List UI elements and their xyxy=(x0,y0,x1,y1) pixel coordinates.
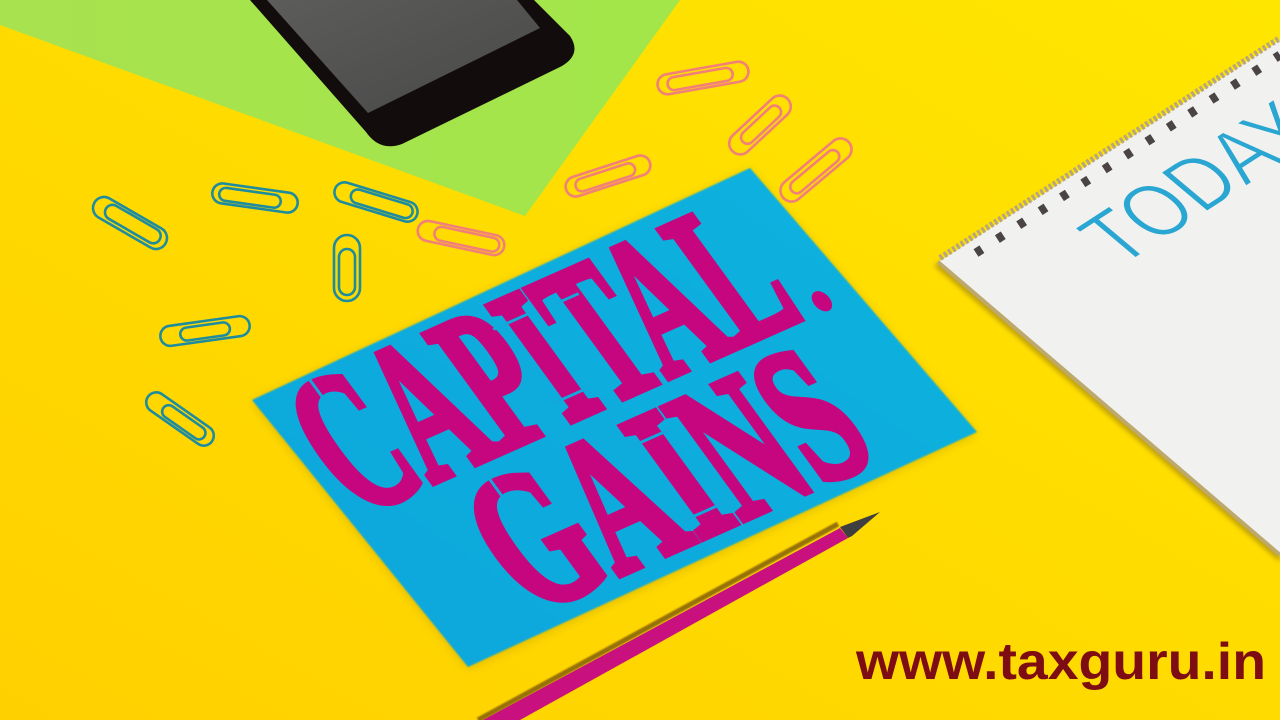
icons: pink paper clips xyxy=(416,60,856,257)
paper clip 5 xyxy=(159,315,251,347)
icons: teal paper clips xyxy=(89,180,420,450)
paper clip 2 xyxy=(211,182,299,214)
icon: magenta pencil xyxy=(478,512,880,720)
panel: blue card with stencil title xyxy=(245,160,977,667)
title period: . xyxy=(755,218,852,334)
paper clip 7 xyxy=(416,219,506,257)
panel: green paper xyxy=(0,0,680,216)
paper clip 6 xyxy=(142,388,218,450)
title line: GAINS: GAINS xyxy=(423,308,909,651)
paper clip 10 xyxy=(563,153,653,199)
title line: CAPITAL xyxy=(245,160,835,554)
icon: smartphone xyxy=(250,0,574,146)
paper clip 3 xyxy=(332,180,420,224)
card shadow xyxy=(252,170,977,669)
paper clip 9 xyxy=(725,91,795,159)
paper clip 8 xyxy=(656,60,750,96)
panel: spiral notebook xyxy=(938,38,1280,555)
notebook shadow xyxy=(934,258,1280,562)
title line: GAINS xyxy=(423,308,909,651)
paper clip 4 xyxy=(334,235,360,301)
paper clip 11 xyxy=(776,134,856,206)
paper clip 1 xyxy=(89,193,171,253)
watermark: website address: www.taxguru.in xyxy=(855,633,1266,691)
